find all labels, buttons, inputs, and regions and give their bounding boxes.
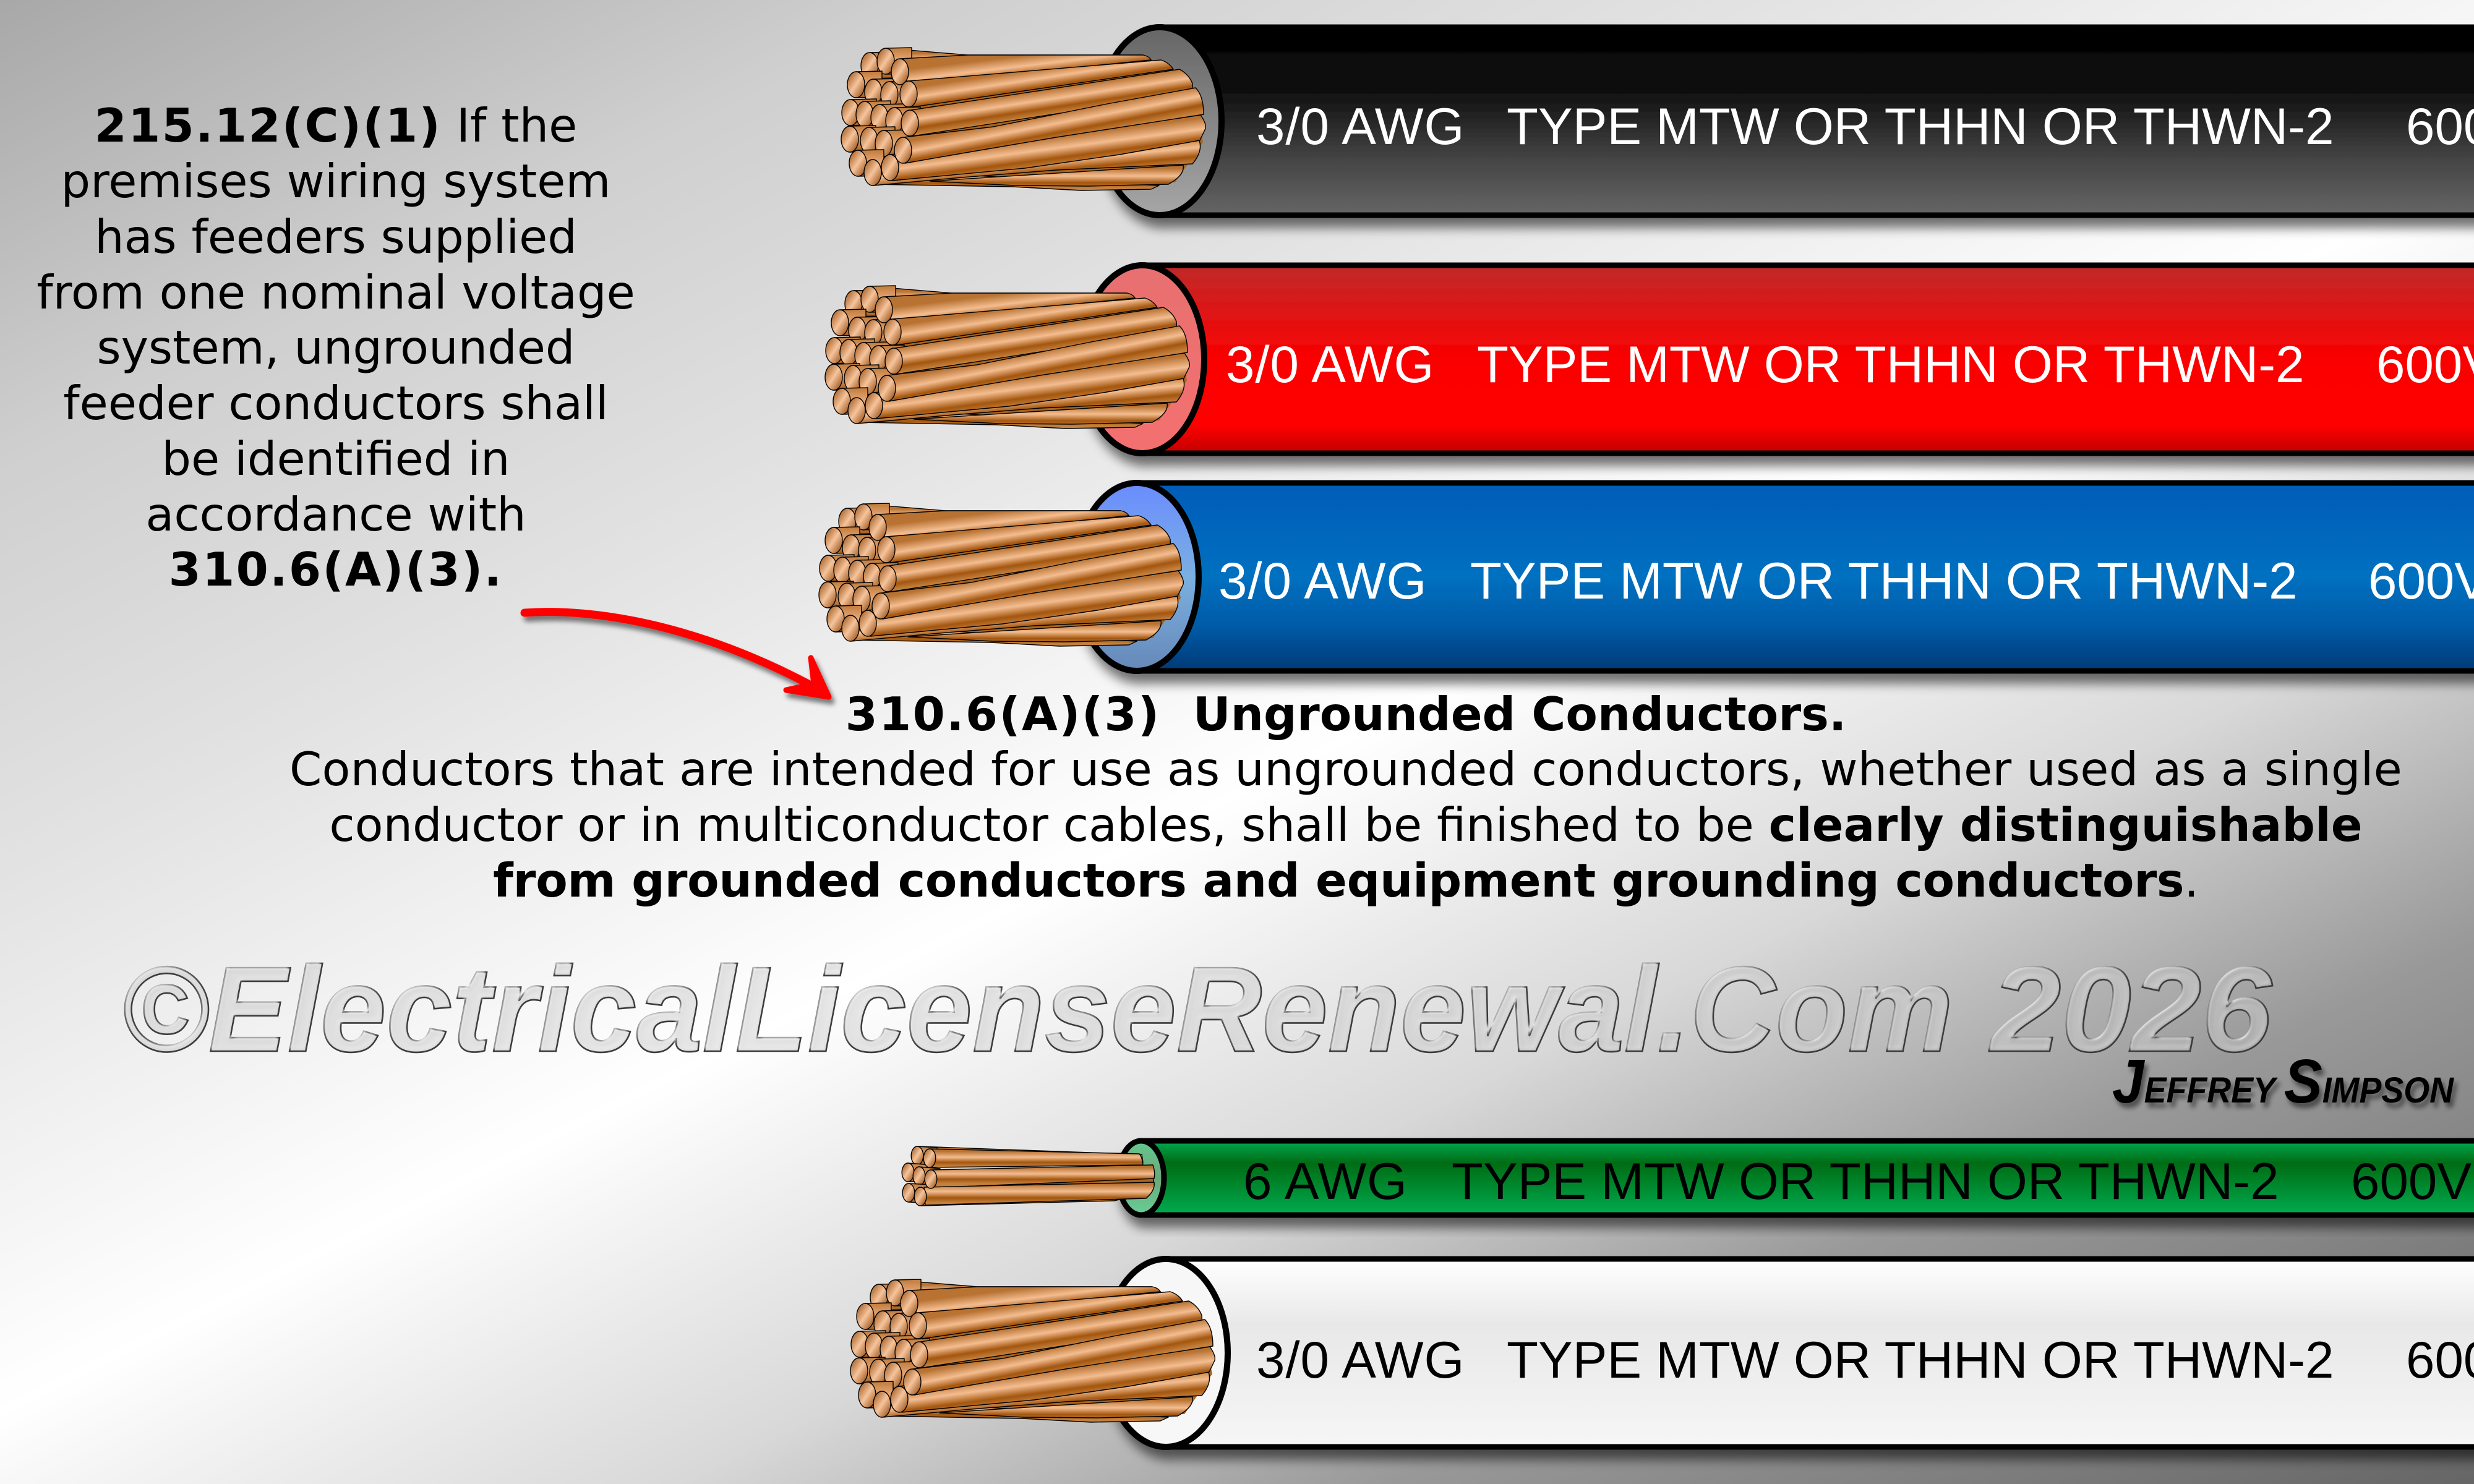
white wire label: TYPE MTW OR THHN OR THWN-2 bbox=[1507, 1331, 2334, 1389]
red wire label: 3/0 AWG bbox=[1226, 335, 1434, 393]
watermark: 2026 bbox=[1988, 942, 2273, 1077]
red wire label: TYPE MTW OR THHN OR THWN-2 bbox=[1477, 335, 2305, 393]
green wire label: 600V bbox=[2351, 1152, 2472, 1210]
wire: black conductor bbox=[841, 27, 2474, 215]
wire: red conductor bbox=[825, 265, 2474, 453]
text block: 215.12(C)(1) rule: accordance with bbox=[145, 487, 526, 542]
green wire insulation bbox=[1118, 1141, 2474, 1215]
text block: 310.6(A)(3) rule: Conductors that are intended for use as ungrounded conductors, whether used as a single bbox=[289, 742, 2402, 796]
text block: 215.12(C)(1) rule: system, ungrounded bbox=[96, 320, 575, 375]
text block: 215.12(C)(1) rule: from one nominal voltage bbox=[36, 265, 635, 320]
red wire copper strands bbox=[825, 286, 1189, 429]
text block: 215.12(C)(1) rule: be identified in bbox=[161, 432, 510, 486]
arrow: red curved pointer bbox=[524, 612, 829, 697]
text block: 215.12(C)(1) rule: feeder conductors shall bbox=[63, 376, 609, 430]
green wire label: 6 AWG bbox=[1243, 1152, 1408, 1210]
white wire insulation bbox=[1104, 1259, 2474, 1447]
blue wire copper strands bbox=[819, 503, 1183, 646]
black wire copper strands bbox=[841, 48, 1205, 190]
text block: 215.12(C)(1) rule: 215.12(C)(1) If the bbox=[95, 98, 577, 153]
text block: 310.6(A)(3) rule: from grounded conductors and equipment grounding conductors. bbox=[493, 853, 2199, 908]
black wire label: TYPE MTW OR THHN OR THWN-2 bbox=[1507, 97, 2334, 155]
text block: 215.12(C)(1) rule: premises wiring system bbox=[61, 154, 610, 208]
blue wire insulation bbox=[1075, 483, 2474, 671]
text block: 215.12(C)(1) rule: has feeders supplied bbox=[95, 210, 577, 264]
text block: 310.6(A)(3) rule: 310.6(A)(3) Ungrounded Conductors. bbox=[845, 687, 1846, 741]
green wire copper strands bbox=[902, 1146, 1155, 1206]
signature: JEFFREY SIMPSON bbox=[2112, 1047, 2454, 1116]
wire: white conductor bbox=[850, 1259, 2474, 1447]
blue wire label: 3/0 AWG bbox=[1218, 552, 1427, 610]
blue wire label: TYPE MTW OR THHN OR THWN-2 bbox=[1470, 552, 2298, 610]
black wire insulation bbox=[1098, 27, 2474, 215]
wire: blue conductor bbox=[819, 483, 2474, 671]
wire: green conductor bbox=[902, 1141, 2474, 1215]
black wire label: 3/0 AWG bbox=[1256, 97, 1465, 155]
white wire label: 3/0 AWG bbox=[1256, 1331, 1465, 1389]
white wire copper strands bbox=[850, 1279, 1215, 1422]
text block: 215.12(C)(1) rule: 310.6(A)(3). bbox=[169, 542, 503, 597]
green wire label: TYPE MTW OR THHN OR THWN-2 bbox=[1452, 1152, 2279, 1210]
text block: 310.6(A)(3) rule bbox=[289, 687, 2402, 908]
text block: 215.12(C)(1) rule bbox=[36, 98, 635, 597]
red wire insulation bbox=[1081, 265, 2474, 453]
text block: 310.6(A)(3) rule: conductor or in multiconductor cables, shall be finished to be clearly distinguishable bbox=[329, 798, 2363, 852]
watermark: ©ElectricalLicenseRenewal.Com bbox=[121, 942, 1953, 1077]
